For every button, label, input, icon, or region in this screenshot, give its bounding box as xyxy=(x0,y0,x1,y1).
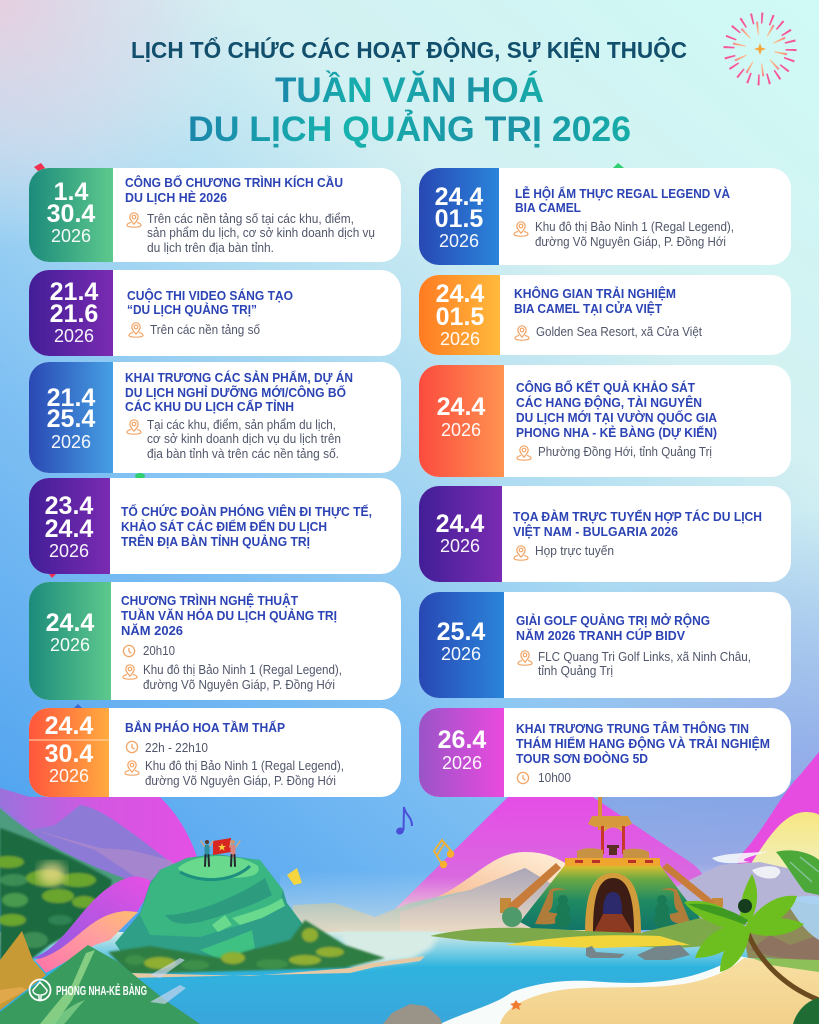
date panel: 2026 xyxy=(441,420,481,440)
icon: clock xyxy=(517,772,529,784)
card: Chương trình nghệ thuật xyxy=(29,582,401,700)
location text: Trên các nền tảng số tại các khu, điểm, xyxy=(147,212,354,226)
card: Bắn pháo hoa tầm thấp xyxy=(29,708,401,797)
date panel: 21.4 xyxy=(47,384,95,412)
location text xyxy=(145,759,344,788)
distant purple mountain xyxy=(0,805,180,885)
heading: main title line 1: TUẦN VĂN HOÁ xyxy=(275,70,544,110)
location text: đường Võ Nguyên Giáp, P. Đồng Hới xyxy=(143,678,335,692)
location text: sản phẩm du lịch, cơ sở kinh doanh dịch vụ xyxy=(147,226,375,240)
event title xyxy=(513,509,762,539)
white clouds xyxy=(712,851,780,879)
palm tree xyxy=(684,874,819,1000)
event title: CUỘC THI VIDEO SÁNG TẠO xyxy=(127,288,293,303)
location text: đường Võ Nguyên Giáp, P. Đồng Hới xyxy=(145,774,336,788)
event title xyxy=(514,286,676,316)
location text xyxy=(535,220,734,249)
event title: GIẢI GOLF QUẢNG TRỊ MỞ RỘNG xyxy=(516,613,710,628)
event title xyxy=(516,380,718,440)
card: Khai trương các sản phẩm xyxy=(29,362,401,473)
icon: location pin xyxy=(127,420,141,434)
waterfall right xyxy=(785,896,819,940)
sand beach xyxy=(500,958,819,1024)
date panel xyxy=(419,168,499,265)
location text: tỉnh Quảng Trị xyxy=(538,664,613,678)
icon: location pin xyxy=(123,665,137,679)
event title: VIỆT NAM - BULGARIA 2026 xyxy=(513,524,678,539)
island greenery around monument xyxy=(430,918,745,948)
card: Không gian trải nghiệm xyxy=(419,275,791,355)
right sky xyxy=(590,780,819,900)
icon: location pin xyxy=(125,761,139,775)
event title: BIA CAMEL TẠI CỬA VIỆT xyxy=(514,301,662,316)
event title xyxy=(516,613,710,643)
icon: clock xyxy=(126,741,138,753)
event title: TRÊN ĐỊA BÀN TỈNH QUẢNG TRỊ xyxy=(121,534,310,549)
confetti: green dot xyxy=(135,473,145,479)
date panel: 2026 xyxy=(440,329,480,349)
illustration: landscape with mountains, hill, monument and beach xyxy=(0,752,819,1024)
heading: subtitle: LỊCH TỔ CHỨC CÁC HOẠT ĐỘNG, SỰ KIỆN THUỘC xyxy=(131,36,687,63)
icon: fireworks xyxy=(729,18,791,80)
cranes xyxy=(535,888,690,924)
pink wave band xyxy=(33,877,155,960)
event title: TỌA ĐÀM TRỰC TUYẾN HỢP TÁC DU LỊCH xyxy=(513,509,762,524)
date panel xyxy=(419,708,504,797)
location text xyxy=(538,650,751,678)
orange wave band xyxy=(35,911,138,973)
starfish xyxy=(510,1000,522,1010)
icon: location pin xyxy=(514,222,528,236)
location text: Tại các khu, điểm, sản phẩm du lịch, xyxy=(147,418,336,432)
green mountain bottom left xyxy=(0,945,200,1024)
time text: 20h10 xyxy=(143,644,175,658)
date panel: 1.4 xyxy=(54,178,88,206)
icon: people holding flag xyxy=(201,838,240,866)
date panel: 2026 xyxy=(54,326,94,346)
card: Công bố chương trình kích cầu xyxy=(29,168,401,262)
event title: TỔ CHỨC ĐOÀN PHÓNG VIÊN ĐI THỰC TẾ, xyxy=(121,504,372,519)
date panel: 01.5 xyxy=(435,205,483,233)
forest left xyxy=(0,828,112,990)
topiary xyxy=(555,895,670,928)
event title: BIA CAMEL xyxy=(515,200,581,215)
date panel xyxy=(29,582,111,700)
event title: KHAI TRƯƠNG TRUNG TÂM THÔNG TIN xyxy=(516,721,749,736)
date panel xyxy=(29,708,109,797)
location text: Trên các nền tảng số xyxy=(150,323,260,337)
heading: main title line 2: DU LỊCH QUẢNG TRỊ 2026 xyxy=(188,109,631,149)
location text: địa bàn tỉnh và trên các nền tảng số. xyxy=(147,447,339,461)
date panel: 24.4 xyxy=(437,393,485,421)
icon: location pin xyxy=(127,213,141,227)
event title xyxy=(516,721,770,766)
magenta shape behind monument xyxy=(392,795,704,912)
date panel xyxy=(29,362,113,473)
time text: 22h - 22h10 xyxy=(145,741,208,755)
confetti: blue small xyxy=(74,704,82,708)
date panel: 2026 xyxy=(441,644,481,664)
date panel: 2026 xyxy=(442,753,482,773)
icon: clock xyxy=(123,645,135,657)
date panel xyxy=(29,270,113,356)
icon: location pin xyxy=(515,326,529,340)
rocks in water xyxy=(585,945,690,960)
event title: NĂM 2026 TRANH CÚP BIDV xyxy=(516,628,685,643)
left magenta shape xyxy=(0,788,198,880)
location text xyxy=(143,663,342,692)
rocks bottom xyxy=(383,1004,442,1024)
date panel: 26.4 xyxy=(438,726,486,754)
event title: KHÔNG GIAN TRẢI NGHIỆM xyxy=(514,286,676,301)
location text: cơ sở kinh doanh dịch vụ du lịch trên xyxy=(147,432,341,446)
date panel: 2026 xyxy=(440,536,480,556)
confetti: red small xyxy=(49,574,56,578)
date panel xyxy=(29,168,113,262)
date panel: 24.4 xyxy=(45,712,93,740)
date panel: 23.4 xyxy=(45,492,93,520)
card: Tọa đàm trực tuyến xyxy=(419,486,791,582)
date panel: 2026 xyxy=(51,226,91,246)
event title: TUẦN VĂN HÓA DU LỊCH QUẢNG TRỊ xyxy=(121,608,337,623)
foam xyxy=(440,956,760,1024)
event title xyxy=(125,175,343,205)
right shore vegetation and rocks xyxy=(745,900,819,965)
event title xyxy=(127,288,293,317)
confetti: yellow xyxy=(287,868,302,885)
event title: NĂM 2026 xyxy=(121,623,183,638)
card: Lễ hội ẩm thực xyxy=(419,168,791,265)
date panel: 2026 xyxy=(49,766,89,786)
date panel: 21.6 xyxy=(50,300,98,328)
gold rock xyxy=(0,931,46,1010)
location text xyxy=(147,212,375,255)
date panel xyxy=(419,275,500,355)
location text: FLC Quang Tri Golf Links, xã Ninh Châu, xyxy=(538,650,751,664)
location text: Họp trực tuyến xyxy=(535,544,614,558)
confetti: green top middle xyxy=(613,163,624,168)
date panel: 24.4 xyxy=(45,515,93,543)
event title: LỄ HỘI ẨM THỰC REGAL LEGEND VÀ xyxy=(515,186,731,201)
event title xyxy=(121,504,372,549)
date panel: 2026 xyxy=(51,432,91,452)
card: Tổ chức đoàn phóng viên xyxy=(29,478,401,574)
bush bottom right xyxy=(793,998,819,1024)
icon: location pin xyxy=(129,323,143,337)
event title xyxy=(125,370,353,414)
logo: Phong Nha-Kẻ Bàng: PHONG NHA-KẺ BÀNG xyxy=(56,983,147,998)
sky haze above horizon xyxy=(280,870,440,935)
sea xyxy=(0,932,819,1024)
event title: CÔNG BỐ KẾT QUẢ KHẢO SÁT xyxy=(516,380,695,395)
date panel: 25.4 xyxy=(47,405,95,433)
date panel: 01.5 xyxy=(436,303,484,331)
location text: Phường Đồng Hới, tỉnh Quảng Trị xyxy=(538,445,712,459)
peach hill xyxy=(430,852,575,905)
event title: DU LỊCH HÈ 2026 xyxy=(125,190,227,205)
event title: PHONG NHA - KẺ BÀNG (DỰ KIẾN) xyxy=(516,425,717,440)
distant mountains centre xyxy=(293,868,600,938)
date panel xyxy=(29,478,110,574)
beach strip left xyxy=(130,956,425,978)
logo: Phong Nha-Kẻ Bàng xyxy=(30,980,147,1000)
date panel xyxy=(419,486,502,582)
date panel xyxy=(419,365,504,477)
event title: CÔNG BỐ CHƯƠNG TRÌNH KÍCH CẦU xyxy=(125,175,343,190)
event title: CÁC KHU DU LỊCH CẤP TỈNH xyxy=(125,399,294,414)
event title: DU LỊCH MỚI TẠI VƯỜN QUỐC GIA xyxy=(516,410,718,425)
event title: “DU LỊCH QUẢNG TRỊ” xyxy=(127,302,257,317)
tree line under hill xyxy=(108,920,385,974)
hill xyxy=(115,854,320,965)
waterfall mist xyxy=(150,958,186,1004)
green slope left xyxy=(0,808,135,920)
icon: blue music note xyxy=(395,807,412,836)
date panel: 30.4 xyxy=(47,200,95,228)
location text: du lịch trên địa bàn tỉnh. xyxy=(147,241,274,255)
date panel: 24.4 xyxy=(436,510,484,538)
card: Khai trương trung tâm thông tin xyxy=(419,708,791,797)
location text: Khu đô thị Bảo Ninh 1 (Regal Legend), xyxy=(143,663,342,677)
date panel: 2026 xyxy=(49,541,89,561)
event title: BẮN PHÁO HOA TẦM THẤP xyxy=(125,720,285,735)
date panel: 25.4 xyxy=(437,618,485,646)
icon: location pin xyxy=(518,651,532,665)
date panel: 21.4 xyxy=(50,278,98,306)
event title: DU LỊCH NGHỈ DƯỠNG MỚI/CÔNG BỐ xyxy=(125,385,346,400)
magenta shape far right xyxy=(738,752,819,870)
event title: KHAI TRƯƠNG CÁC SẢN PHẨM, DỰ ÁN xyxy=(125,370,353,385)
second palm fronds top right xyxy=(776,850,819,895)
card: Công bố kết quả khảo sát xyxy=(419,365,791,477)
card: Cuộc thi video sáng tạo xyxy=(29,270,401,356)
pale water near horizon xyxy=(340,932,440,968)
location text: Khu đô thị Bảo Ninh 1 (Regal Legend), xyxy=(145,759,344,773)
event title: KHẢO SÁT CÁC ĐIỂM ĐẾN DU LỊCH xyxy=(121,519,327,534)
date panel: 24.4 xyxy=(46,609,94,637)
monument xyxy=(500,797,723,934)
event title xyxy=(121,593,337,638)
card: Giải golf xyxy=(419,592,791,698)
event title: TOUR SƠN ĐOÒNG 5D xyxy=(516,751,648,766)
location text: đường Võ Nguyên Giáp, P. Đồng Hới xyxy=(535,235,726,249)
date panel xyxy=(419,592,504,698)
date panel: 24.4 xyxy=(435,183,483,211)
icon: gold music notes xyxy=(434,840,453,867)
date panel: 2026 xyxy=(50,635,90,655)
location text xyxy=(147,418,341,461)
event title: CHƯƠNG TRÌNH NGHỆ THUẬT xyxy=(121,593,298,608)
icon: location pin xyxy=(514,546,528,560)
event title xyxy=(515,186,731,215)
yellow hill far right xyxy=(752,812,819,900)
date panel: 2026 xyxy=(439,231,479,251)
location text: Golden Sea Resort, xã Cửa Việt xyxy=(536,325,702,339)
date panel: 24.4 xyxy=(436,280,484,308)
event title: THÁM HIỂM HANG ĐỘNG VÀ TRẢI NGHIỆM xyxy=(516,736,770,751)
time text: 10h00 xyxy=(538,771,571,785)
event title: CÁC HANG ĐỘNG, TÀI NGUYÊN xyxy=(516,395,702,410)
date panel: 30.4 xyxy=(45,740,93,768)
icon: location pin xyxy=(517,446,531,460)
confetti: red top left xyxy=(34,163,45,172)
location text: Khu đô thị Bảo Ninh 1 (Regal Legend), xyxy=(535,220,734,234)
